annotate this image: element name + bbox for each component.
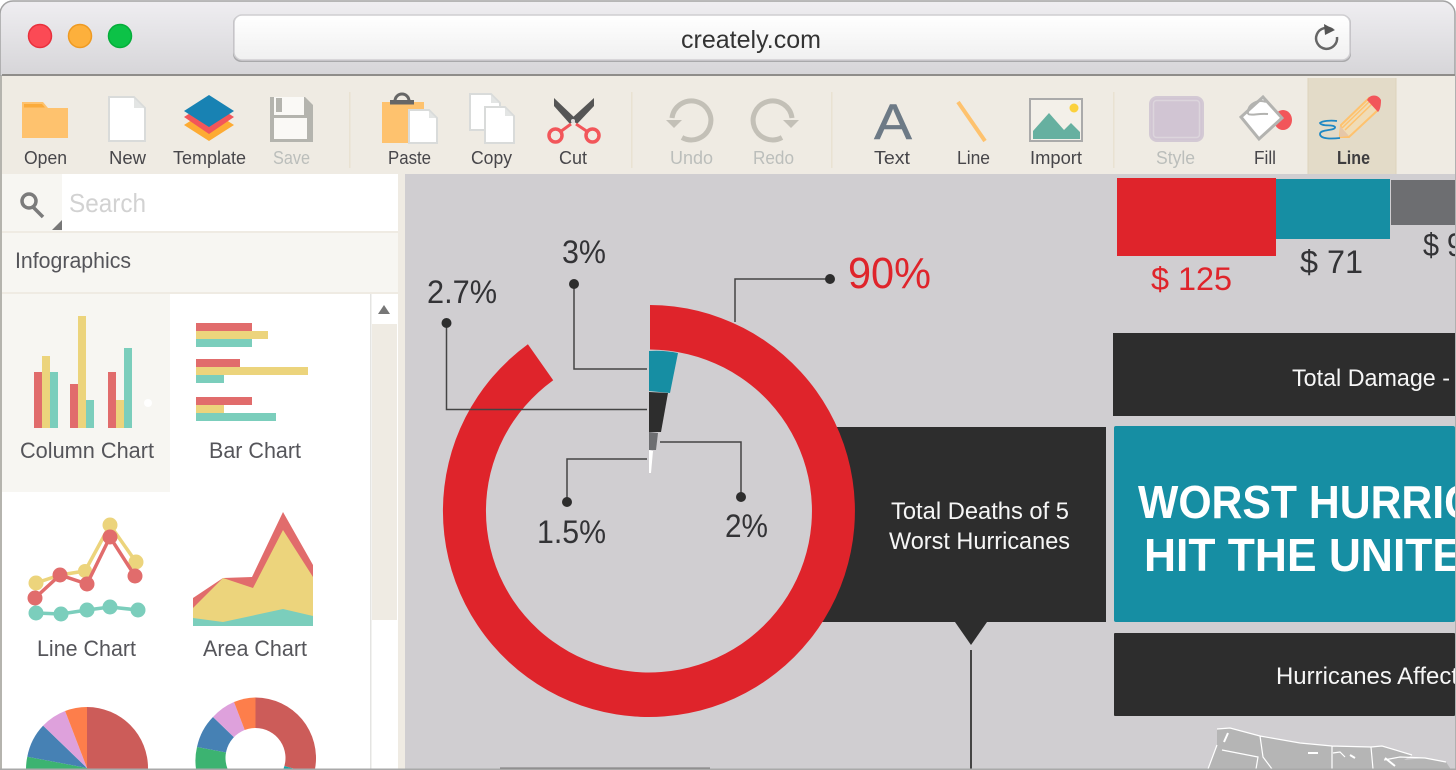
thumbnail: Line Chart: Line Chart [37, 636, 136, 661]
search box: Search [69, 188, 146, 218]
toolbar button: Style: Style [1156, 148, 1195, 168]
toolbar button: Open [22, 102, 68, 168]
toolbar button: Line [957, 102, 990, 168]
leader and label: 1.5% [537, 459, 647, 550]
map of the United States [1208, 728, 1450, 769]
callout: total deaths: Total Deaths of 5 [891, 498, 1069, 525]
leader and label: 90%: 90% [848, 249, 931, 298]
leader and label: 1.5%: 1.5% [537, 514, 606, 550]
infographic canvas [405, 174, 1456, 769]
toolbar button: Undo: Undo [670, 148, 713, 168]
toolbar button: Open: Open [24, 148, 67, 168]
toolbar button: Redo: Redo [753, 148, 794, 168]
bar: $ 125: $ 125 [1151, 261, 1232, 297]
leader and label: 2.7% [427, 274, 647, 410]
toolbar button: Import: Import [1030, 148, 1082, 168]
toolbar button: Import [1030, 99, 1082, 168]
toolbar button: Line: Line [957, 148, 990, 168]
sidebar scrollbar [370, 294, 397, 769]
toolbar button: Fill [1241, 97, 1292, 168]
leader and label: 2% [660, 442, 768, 544]
toolbar button: Template [173, 95, 246, 168]
bar: $ 71: $ 71 [1300, 244, 1363, 280]
leader and label: 90% [735, 249, 931, 322]
thumbnail: Area Chart: Area Chart [203, 636, 307, 661]
donut chart: share of deaths [443, 305, 855, 717]
toolbar button: Copy [470, 94, 514, 168]
banner: total damage [1113, 333, 1455, 416]
toolbar button: Style [1150, 97, 1203, 168]
bar: $ 125 [1117, 178, 1276, 297]
thumbnail: Column Chart [2, 294, 170, 492]
toolbar button: Cut [549, 98, 599, 168]
thumbnail: Column Chart: Column Chart [20, 438, 154, 463]
toolbar button: Template: Template [173, 148, 246, 168]
toolbar button: Line (active) [1308, 78, 1396, 174]
left sidebar [2, 174, 405, 770]
thumbnail: Bar Chart [196, 323, 308, 463]
toolbar button: Cut: Cut [559, 148, 587, 168]
callout: total deaths: Worst Hurricanes [889, 528, 1070, 555]
toolbar button: Redo [753, 101, 799, 168]
browser title bar [0, 1, 1455, 76]
leader and label: 2%: 2% [725, 508, 768, 544]
leader and label: 2.7%: 2.7% [427, 274, 497, 310]
toolbar button: Fill: Fill [1254, 148, 1276, 168]
thumbnail: Donut Chart [195, 698, 316, 769]
thumbnail: Area Chart [193, 512, 313, 661]
search box [2, 174, 146, 231]
address bar [233, 15, 1351, 62]
toolbar button: Text: Text [874, 148, 910, 168]
title panel [1114, 426, 1456, 622]
timeline connector [500, 650, 972, 769]
leader and label: 3% [562, 234, 647, 369]
thumbnail: Pie Chart [26, 707, 148, 769]
toolbar button: Save [270, 97, 313, 168]
toolbar button: Line (active): Line [1337, 148, 1370, 168]
thumbnail: Bar Chart: Bar Chart [209, 438, 301, 463]
banner: total damage: Total Damage - [1292, 365, 1450, 392]
category heading: Infographics [15, 248, 131, 273]
address bar: creately.com [681, 26, 821, 54]
toolbar button: Paste: Paste [388, 148, 431, 168]
toolbar button: Undo [666, 101, 713, 168]
toolbar button: Text: A [874, 94, 913, 150]
toolbar button: Copy: Copy [471, 148, 512, 168]
leader and label: 3%: 3% [562, 234, 606, 270]
toolbar button: Paste [382, 94, 437, 168]
toolbar button: New [109, 97, 147, 168]
toolbar [2, 76, 1455, 174]
thumbnail: Line Chart [28, 518, 146, 661]
banner: hurricanes affected: Hurricanes Affect [1276, 663, 1456, 690]
category heading [2, 231, 398, 294]
toolbar button: Text [874, 94, 913, 168]
banner: hurricanes affected [1114, 633, 1456, 716]
bar: $ 9 [1391, 180, 1456, 263]
window control buttons [28, 24, 132, 48]
bar: $ 71 [1276, 179, 1390, 280]
toolbar button: New: New [109, 148, 147, 168]
callout: total deaths [815, 427, 1106, 645]
toolbar button: Save: Save [273, 148, 310, 168]
